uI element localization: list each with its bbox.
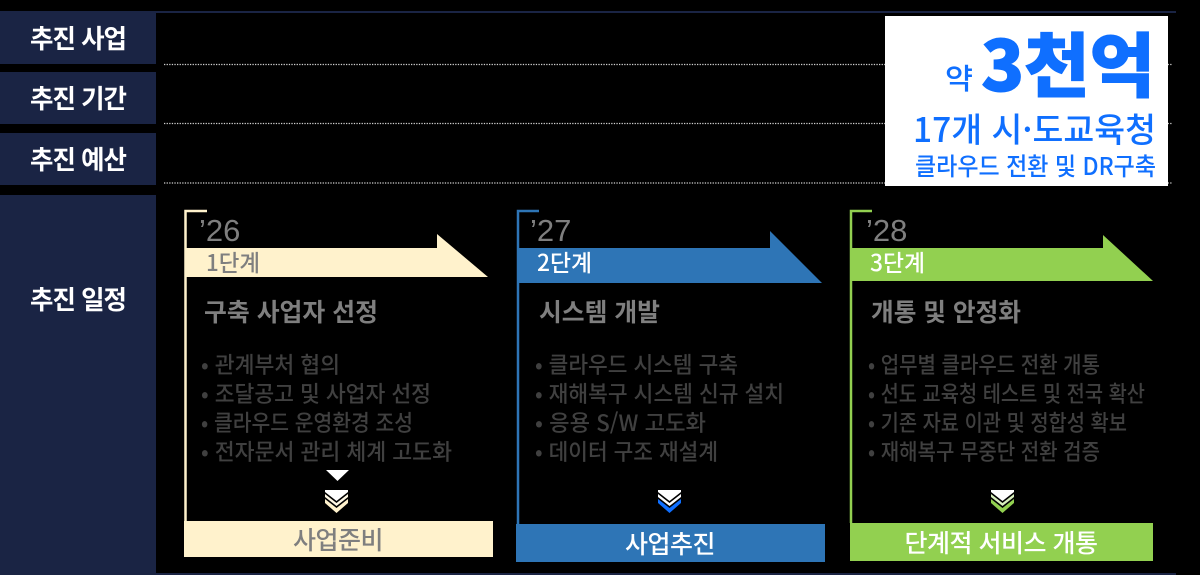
row label: 추진 기간 — [0, 72, 156, 124]
row label: 추진 예산: 추진 예산 — [30, 140, 127, 177]
panel: phase 1 — [184, 211, 493, 557]
result bar: 사업준비 — [184, 521, 493, 557]
task list: phase 1: • 전자문서 관리 체계 고도화 — [201, 435, 452, 467]
heading: phase 2: 시스템 개발 — [539, 293, 660, 329]
heading: phase 1: 구축 사업자 선정 — [204, 293, 378, 329]
callout: budget — [885, 11, 1168, 186]
task list: phase 2: • 클라우드 시스템 구축 — [535, 348, 738, 380]
arrow: step 2 — [518, 231, 822, 283]
row label: 추진 일정: 추진 일정 — [30, 280, 126, 317]
callout scope line: 17개 시·도교육청 — [913, 103, 1156, 152]
task list: phase 3: • 기존 자료 이관 및 정합성 확보 — [868, 406, 1127, 438]
task list: phase 1: • 조달공고 및 사업자 선정 — [201, 377, 431, 409]
task list: phase 1: • 관계부처 협의 — [201, 348, 340, 380]
year 2026: ’26 — [199, 213, 240, 248]
arrow: step 1: 1단계 — [206, 244, 260, 278]
callout detail line: 클라우드 전환 및 DR구축 — [915, 148, 1156, 183]
row label: 추진 일정 — [0, 195, 156, 573]
icon: white triangle — [326, 470, 349, 481]
panel: phase 3 — [850, 211, 1153, 561]
task list: phase 1: • 클라우드 운영환경 조성 — [201, 406, 413, 438]
task list: phase 3: • 재해복구 무중단 전환 검증 — [868, 435, 1100, 467]
heading: phase 3: 개통 및 안정화 — [871, 293, 1021, 329]
arrow: step 1 — [185, 234, 488, 278]
task list: phase 2: • 데이터 구조 재설계 — [535, 435, 718, 467]
task list: phase 3: • 업무별 클라우드 전환 개통 — [868, 348, 1100, 380]
year 2028: ’28 — [866, 213, 907, 248]
row label: 추진 사업 — [0, 12, 156, 64]
arrow: step 3: 3단계 — [870, 244, 925, 278]
task list: phase 2: • 응용 S/W 고도화 — [535, 406, 706, 438]
arrow: step 3 — [851, 235, 1153, 281]
row label: 추진 예산 — [0, 133, 156, 185]
task list: phase 3: • 선도 교육청 테스트 및 전국 확산 — [868, 377, 1145, 409]
result bar: 사업추진 — [516, 524, 825, 562]
icon: down chevrons — [658, 490, 681, 513]
result bar: 단계적 서비스 개통 — [850, 523, 1153, 561]
year 2027: ’27 — [530, 213, 571, 248]
task list: phase 2: • 재해복구 시스템 신규 설치 — [535, 377, 784, 409]
icon: down chevrons — [991, 490, 1014, 513]
result bar: 단계적 서비스 개통: 단계적 서비스 개통 — [904, 524, 1098, 560]
result bar: 사업추진: 사업추진 — [625, 525, 715, 561]
result bar: 사업준비: 사업준비 — [293, 521, 383, 557]
row label: 추진 기간: 추진 기간 — [30, 79, 127, 116]
row label: 추진 사업: 추진 사업 — [30, 19, 126, 56]
callout amount: 약 — [945, 56, 973, 98]
task list: phase 2 — [535, 348, 784, 467]
icon: down chevrons — [325, 490, 348, 513]
task list: phase 3 — [868, 348, 1145, 467]
task list: phase 1 — [201, 348, 452, 467]
arrow: step 2: 2단계 — [537, 244, 592, 278]
callout amount: 3천억 — [981, 11, 1155, 112]
panel: phase 2 — [516, 211, 825, 562]
